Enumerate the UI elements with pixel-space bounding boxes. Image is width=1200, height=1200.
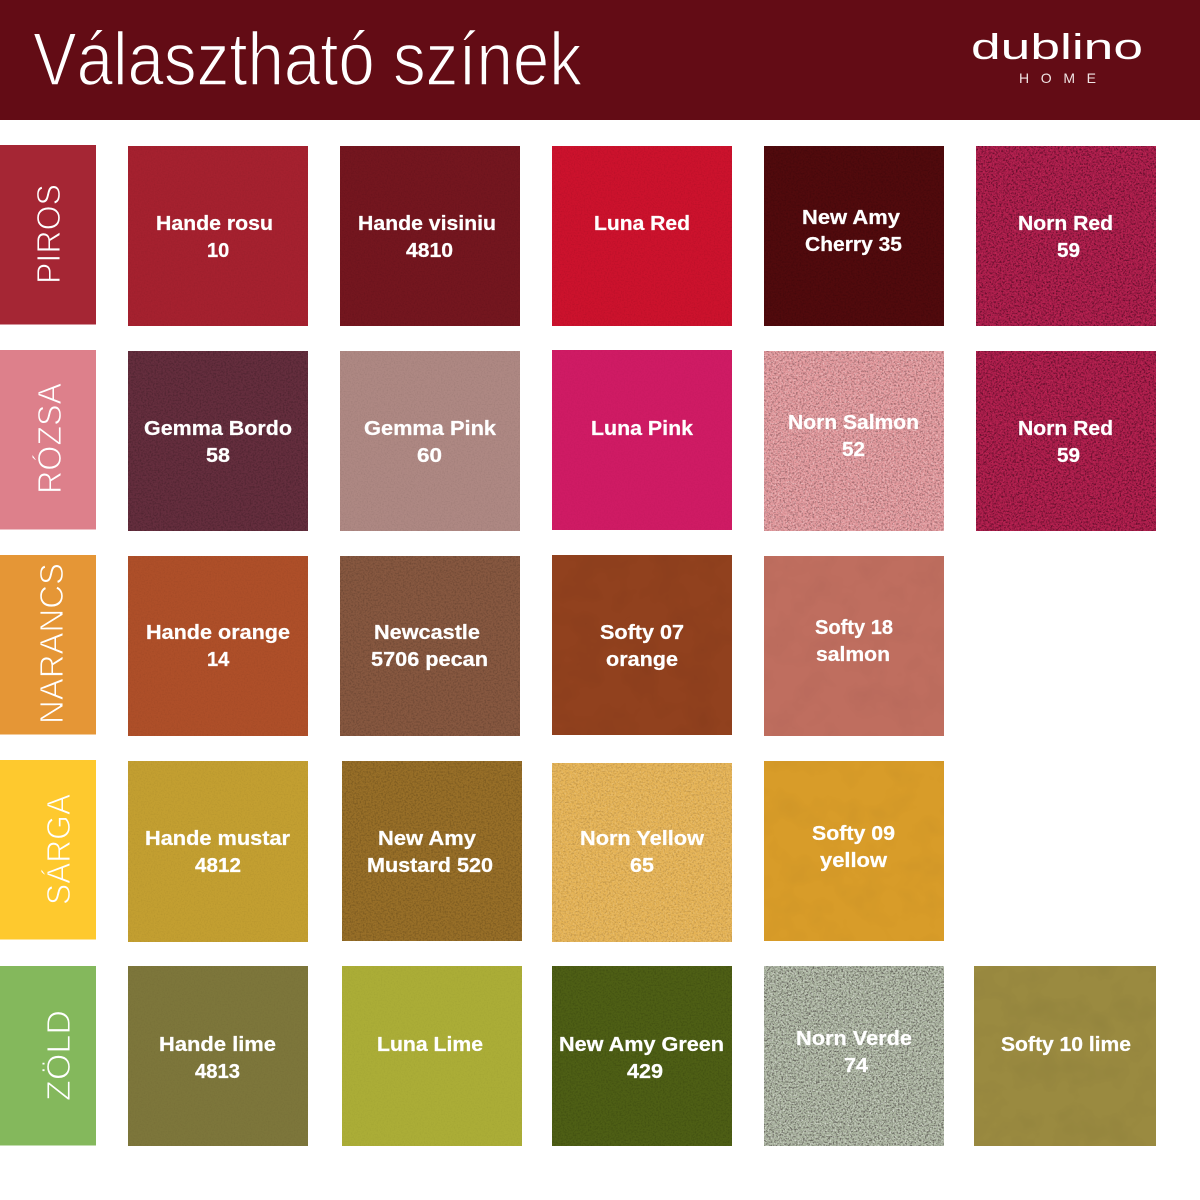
swatch: New Amy Mustard 520: Mustard 520 bbox=[367, 855, 493, 877]
swatch: Hande orange 14: 14 bbox=[207, 649, 230, 671]
swatch: Hande lime 4813: 4813 bbox=[195, 1061, 240, 1083]
swatch: Norn Salmon 52: 52 bbox=[842, 439, 865, 461]
swatch: New Amy Mustard 520 bbox=[342, 761, 522, 941]
swatch: Softy 18 salmon: Softy 18 bbox=[815, 617, 893, 639]
swatch: New Amy Green 429: 429 bbox=[627, 1061, 663, 1083]
swatch: Gemma Bordo 58 bbox=[128, 351, 308, 531]
swatch: Gemma Pink 60: Gemma Pink bbox=[364, 418, 497, 440]
category tab: RÓZSA bbox=[0, 350, 96, 530]
swatch: New Amy Green 429 bbox=[552, 966, 732, 1146]
swatch: Luna Red: Luna Red bbox=[594, 213, 690, 235]
swatch: Norn Salmon 52: Norn Salmon bbox=[788, 412, 919, 434]
swatch: Norn Verde 74: 74 bbox=[844, 1055, 869, 1077]
swatch: Luna Pink: Luna Pink bbox=[591, 418, 694, 440]
swatch: Hande mustar 4812 bbox=[128, 761, 308, 942]
swatch: Hande lime 4813 bbox=[128, 966, 308, 1146]
swatch: Hande visiniu 4810: Hande visiniu bbox=[358, 213, 496, 235]
category tab: PIROS: PIROS bbox=[30, 184, 67, 284]
swatch: Hande rosu 10: Hande rosu bbox=[156, 213, 273, 235]
category tab: NARANCS bbox=[0, 555, 96, 734]
swatch: Newcastle 5706 pecan: 5706 pecan bbox=[371, 649, 488, 671]
swatch: Norn Red 59 (row 2) bbox=[976, 351, 1156, 531]
header banner bbox=[0, 0, 1200, 120]
swatch: Gemma Bordo 58: Gemma Bordo bbox=[144, 418, 292, 440]
swatch: Hande rosu 10: 10 bbox=[207, 240, 229, 262]
swatch: Hande visiniu 4810 bbox=[340, 146, 520, 326]
swatch: New Amy Mustard 520: New Amy bbox=[378, 828, 477, 850]
swatch: Softy 09 yellow bbox=[764, 761, 944, 941]
swatch: Luna Red bbox=[552, 146, 732, 326]
swatch: Hande orange 14: Hande orange bbox=[146, 622, 290, 644]
swatch: Gemma Pink 60 bbox=[340, 351, 520, 531]
swatch: Softy 07 orange bbox=[552, 555, 732, 735]
swatch: New Amy Green 429: New Amy Green bbox=[559, 1034, 724, 1056]
swatch: Norn Yellow 65 bbox=[552, 763, 732, 942]
swatch: Luna Lime: Luna Lime bbox=[377, 1034, 483, 1056]
swatch: Gemma Pink 60: 60 bbox=[417, 445, 442, 467]
swatch: Norn Salmon 52 bbox=[764, 351, 944, 531]
swatch: Norn Red 59 (row 2): 59 bbox=[1057, 445, 1080, 467]
category tab: SÁRGA bbox=[0, 760, 96, 940]
swatch: Norn Red 59: Norn Red bbox=[1018, 213, 1113, 235]
logo: dublino home: dublino bbox=[971, 26, 1143, 67]
logo: dublino home: HOME bbox=[1019, 70, 1096, 86]
swatch: Softy 10 lime bbox=[974, 966, 1156, 1146]
swatch: Norn Red 59: 59 bbox=[1057, 240, 1080, 262]
swatch: Hande rosu 10 bbox=[128, 146, 308, 326]
swatch: New Amy Cherry 35: New Amy bbox=[802, 207, 901, 229]
swatch: Norn Red 59 bbox=[976, 146, 1156, 326]
swatch: Hande mustar 4812: Hande mustar bbox=[145, 828, 290, 850]
swatch: Luna Lime bbox=[342, 966, 522, 1146]
category tab: RÓZSA: RÓZSA bbox=[31, 383, 68, 494]
swatch: Norn Yellow 65: 65 bbox=[630, 855, 654, 877]
swatch: Hande visiniu 4810: 4810 bbox=[406, 240, 453, 262]
swatch: Norn Yellow 65: Norn Yellow bbox=[580, 828, 704, 850]
swatch: Gemma Bordo 58: 58 bbox=[206, 445, 230, 467]
title: Választható színek bbox=[33, 17, 582, 101]
swatch: Newcastle 5706 pecan: Newcastle bbox=[374, 622, 480, 644]
swatch: New Amy Cherry 35 bbox=[764, 146, 944, 326]
swatch: Softy 18 salmon: salmon bbox=[816, 644, 890, 666]
swatch: Luna Pink bbox=[552, 350, 732, 530]
swatch: Softy 09 yellow: Softy 09 bbox=[812, 823, 895, 845]
swatch: Hande lime 4813: Hande lime bbox=[159, 1034, 276, 1056]
swatch: Norn Verde 74: Norn Verde bbox=[796, 1028, 912, 1050]
category tab: ZÖLD bbox=[0, 966, 96, 1146]
swatch: Newcastle 5706 pecan bbox=[340, 556, 520, 736]
swatch: Softy 18 salmon bbox=[764, 556, 944, 736]
swatch: Norn Verde 74 bbox=[764, 966, 944, 1146]
category tab: PIROS bbox=[0, 145, 96, 324]
category tab: NARANCS: NARANCS bbox=[33, 563, 70, 724]
swatch: Norn Red 59 (row 2): Norn Red bbox=[1018, 418, 1113, 440]
swatch: Softy 07 orange: orange bbox=[606, 649, 678, 671]
swatch: Hande orange 14 bbox=[128, 556, 308, 736]
logo: dublino home bbox=[971, 26, 1143, 86]
swatch: Hande mustar 4812: 4812 bbox=[195, 855, 241, 877]
swatch: Softy 10 lime: Softy 10 lime bbox=[1001, 1034, 1131, 1056]
swatch: Softy 09 yellow: yellow bbox=[820, 850, 887, 872]
swatch: Softy 07 orange: Softy 07 bbox=[600, 622, 684, 644]
category tab: SÁRGA: SÁRGA bbox=[40, 794, 77, 905]
category tab: ZÖLD: ZÖLD bbox=[40, 1010, 77, 1101]
swatch: New Amy Cherry 35: Cherry 35 bbox=[805, 234, 902, 256]
